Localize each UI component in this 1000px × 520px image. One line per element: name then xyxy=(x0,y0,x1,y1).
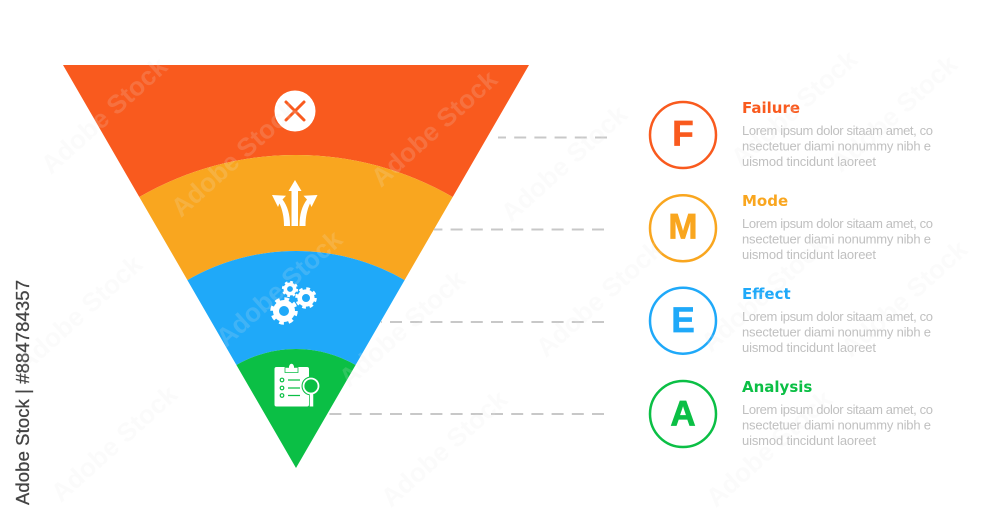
large gear xyxy=(272,299,296,323)
funnel band: mode xyxy=(139,155,453,280)
text block: failure: uismod tincidunt laoreet xyxy=(742,154,876,169)
text block: effect xyxy=(742,285,933,355)
text block: effect: nsectetuer diami nonummy nibh e xyxy=(742,324,931,340)
watermark: Adobe Stock xyxy=(725,44,863,173)
medium gear xyxy=(297,289,315,307)
text block: failure: Lorem ipsum dolor sitaam amet, co xyxy=(742,123,933,138)
text block: analysis: nsectetuer diami nonummy nibh e xyxy=(742,418,931,432)
badge: M: M xyxy=(668,208,698,246)
stock id label: Adobe Stock | #884784357 xyxy=(12,280,33,505)
connector: mode xyxy=(434,228,604,230)
badge: E xyxy=(650,288,716,354)
text block: failure xyxy=(742,99,933,169)
icon: clipboard with magnifier xyxy=(274,363,320,406)
badge: M xyxy=(650,195,716,261)
text block: analysis: uismod tincidunt laoreet xyxy=(742,433,876,448)
watermark: Adobe Stock xyxy=(700,384,838,513)
watermark: Adobe Stock xyxy=(10,249,148,378)
watermark: Adobe Stock xyxy=(165,94,303,223)
text block: mode: nsectetuer diami nonummy nibh e xyxy=(742,232,931,246)
icon: gears xyxy=(272,282,315,323)
text block: mode: Mode xyxy=(742,192,788,210)
connector: effect xyxy=(381,321,604,323)
watermark: Adobe Stock xyxy=(210,224,348,353)
icon: diverging arrows xyxy=(272,180,318,226)
text block: mode: uismod tincidunt laoreet xyxy=(742,247,876,262)
watermark: Adobe Stock xyxy=(35,51,173,180)
funnel band: analysis xyxy=(236,349,356,468)
badge: E: E xyxy=(671,301,695,340)
text block: effect: Lorem ipsum dolor sitaam amet, co xyxy=(742,309,933,324)
text block: mode: Lorem ipsum dolor sitaam amet, co xyxy=(742,216,933,231)
watermark: Adobe Stock xyxy=(825,49,963,178)
funnel band: failure xyxy=(63,65,529,197)
small gear xyxy=(283,282,297,296)
badge: F: F xyxy=(672,114,694,154)
text block: failure: nsectetuer diami nonummy nibh e xyxy=(742,138,931,154)
watermark: Adobe Stock xyxy=(365,64,503,193)
watermark: Adobe Stock xyxy=(695,229,833,358)
text block: analysis xyxy=(742,378,933,448)
connector: failure xyxy=(498,136,607,138)
funnel band: effect xyxy=(187,251,405,365)
watermark: Adobe Stock xyxy=(375,384,513,513)
text block: analysis: Analysis xyxy=(742,378,812,396)
text block: effect: uismod tincidunt laoreet xyxy=(742,340,876,355)
icon: failure cross xyxy=(274,90,316,132)
badge: F xyxy=(650,102,716,168)
badge: A: A xyxy=(670,394,696,434)
watermark: Adobe Stock xyxy=(333,264,471,393)
watermark: Adobe Stock xyxy=(495,99,633,228)
watermark: Adobe Stock xyxy=(835,234,973,363)
badge: A xyxy=(650,381,716,447)
text block: effect: Effect xyxy=(742,285,791,303)
watermark: Adobe Stock xyxy=(530,234,668,363)
text block: failure: Failure xyxy=(742,99,800,117)
watermark: Adobe Stock xyxy=(45,379,183,508)
funnel diagram xyxy=(63,65,529,468)
text block: mode xyxy=(742,192,933,262)
text block: analysis: Lorem ipsum dolor sitaam amet, co xyxy=(742,402,933,417)
connector: analysis xyxy=(329,413,604,415)
